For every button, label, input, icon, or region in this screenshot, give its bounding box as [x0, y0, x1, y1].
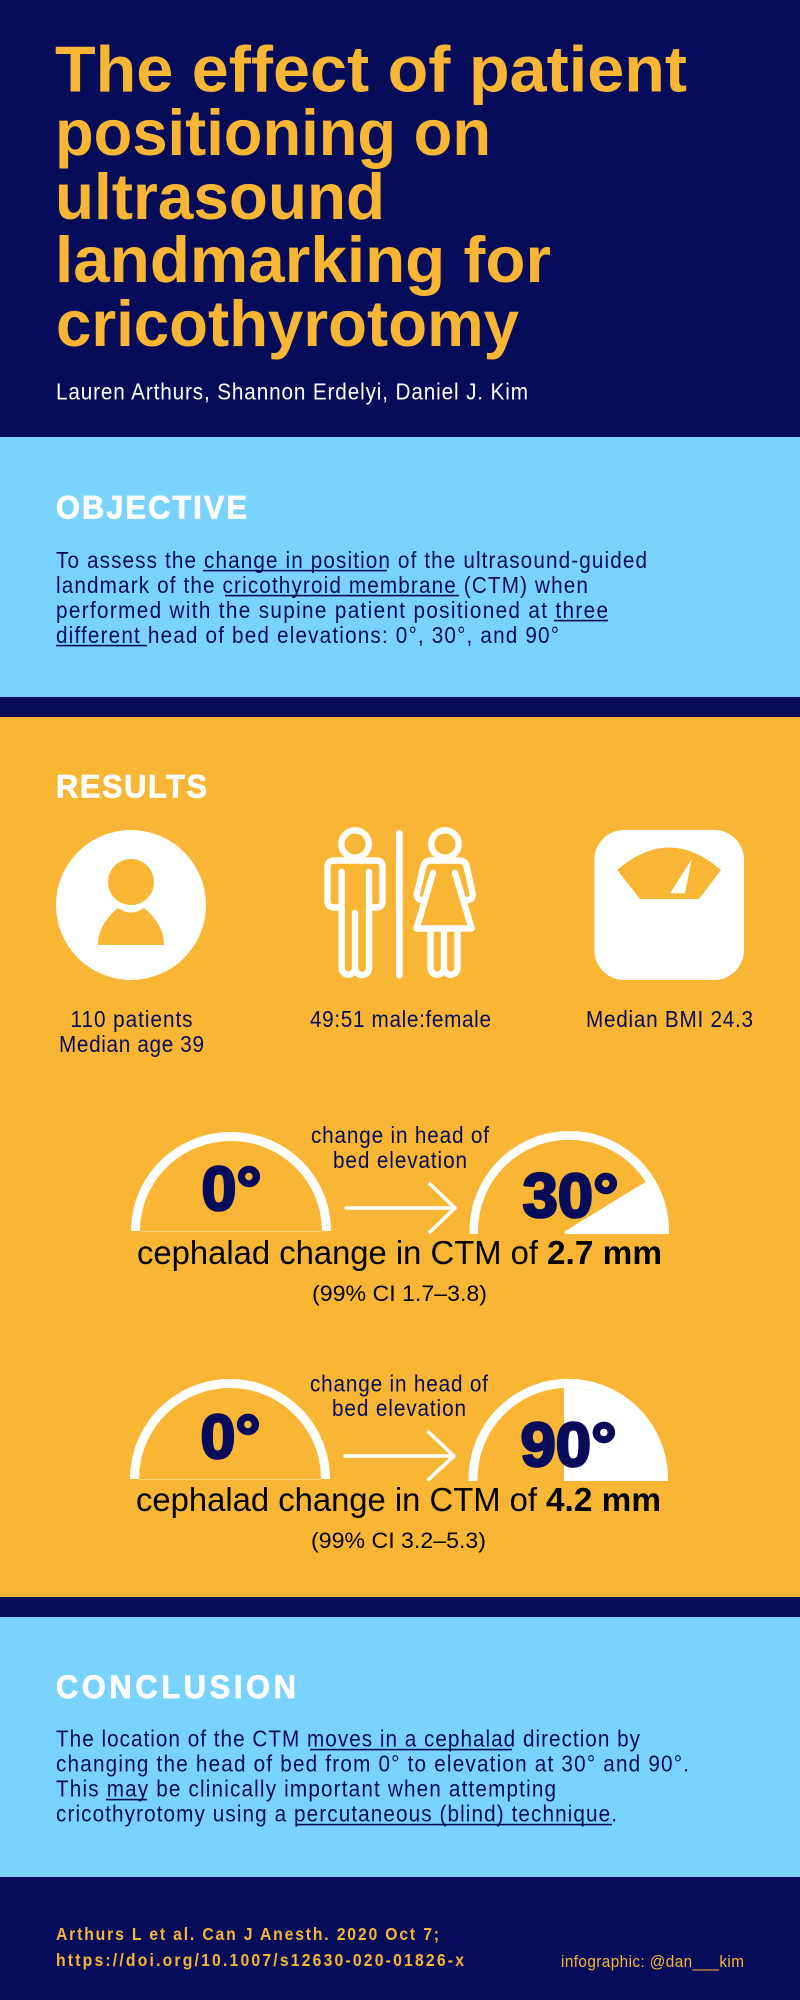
result: 4.2 mm: 4.2 mm [546, 1481, 661, 1518]
stat: patients and age: 110 patients [70, 1006, 193, 1032]
heading: results: RESULTS [56, 769, 207, 805]
icon: weighing scale [594, 830, 744, 980]
label: change in head of bed elevation [311, 1122, 490, 1173]
comparison: 0 to 90 degrees [130, 1370, 668, 1553]
conclusion text [56, 1726, 689, 1827]
objective text: different head of bed elevations: 0°, 30°, and 90° [56, 622, 559, 648]
conclusion text: This may be clinically important when attempting [56, 1776, 556, 1802]
stat: sex ratio: 49:51 male:female [310, 1006, 491, 1032]
label: change in head of bed elevation [310, 1370, 489, 1421]
gauge: 0 degrees: 0° [200, 1403, 260, 1472]
panel: header [0, 0, 800, 437]
citation: https://doi.org/10.1007/s12630-020-01826-x [56, 1950, 465, 1970]
gauge: 0 degrees [131, 1132, 331, 1232]
result: 2.7 mm: 2.7 mm [547, 1234, 662, 1271]
label: change in head of bed elevation: bed elevation [332, 1395, 466, 1421]
result: 2.7 mm: cephalad change in CTM of [137, 1234, 539, 1271]
conclusion text: changing the head of bed from 0° to elevation at 30° and 90°. [56, 1751, 689, 1777]
panel: conclusion [0, 1617, 800, 1877]
panel: footer [56, 1924, 744, 1971]
gauge: 90 degrees: 90° [520, 1411, 616, 1480]
result: 4.2 mm: cephalad change in CTM of [136, 1481, 538, 1518]
objective text: landmark of the cricothyroid membrane (CTM) when [56, 572, 588, 598]
arrow [346, 1184, 455, 1232]
confidence interval: (99% CI 1.7–3.8) [312, 1281, 487, 1306]
objective text: To assess the change in position of the ultrasound-guided [56, 547, 647, 573]
gauge: 0 degrees [130, 1379, 330, 1480]
title: positioning on [55, 96, 491, 169]
objective text [56, 547, 647, 648]
arrow [345, 1432, 454, 1480]
title: cricothyrotomy [56, 287, 519, 360]
heading: conclusion: CONCLUSION [56, 1669, 296, 1705]
icon: patient [56, 830, 206, 980]
label: change in head of bed elevation: bed elevation [333, 1147, 467, 1173]
title [55, 32, 687, 360]
confidence interval: (99% CI 3.2–5.3) [311, 1528, 486, 1553]
heading: objective: OBJECTIVE [56, 490, 247, 526]
label: change in head of bed elevation: change in head of [310, 1370, 489, 1397]
credit: infographic: @dan___kim [561, 1952, 744, 1971]
comparison: 0 to 30 degrees [131, 1122, 669, 1306]
gauge: 90 degrees [468, 1379, 668, 1481]
conclusion text: cricothyrotomy using a percutaneous (blind) technique. [56, 1801, 617, 1827]
panel: results [0, 717, 800, 1597]
stat: patients and age: Median age 39 [59, 1031, 204, 1057]
title: landmarking for [55, 223, 551, 296]
panel: objective [0, 437, 800, 697]
citation [56, 1924, 465, 1970]
objective text: performed with the supine patient positioned at three [56, 597, 608, 623]
label: change in head of bed elevation: change in head of [311, 1122, 490, 1148]
gauge: 30 degrees [470, 1131, 669, 1234]
stat: BMI: Median BMI 24.3 [586, 1006, 753, 1032]
citation: Arthurs L et al. Can J Anesth. 2020 Oct 7; [56, 1924, 439, 1944]
icon: male and female figures [328, 830, 473, 978]
stat: patients and age [59, 1006, 204, 1057]
gauge: 0 degrees: 0° [202, 1155, 262, 1224]
gauge: 30 degrees: 30° [522, 1162, 618, 1231]
title: The effect of patient [55, 32, 687, 106]
title: ultrasound [55, 160, 385, 233]
conclusion text: The location of the CTM moves in a cephalad direction by [56, 1726, 640, 1752]
authors: Lauren Arthurs, Shannon Erdelyi, Daniel J. Kim [56, 378, 528, 405]
